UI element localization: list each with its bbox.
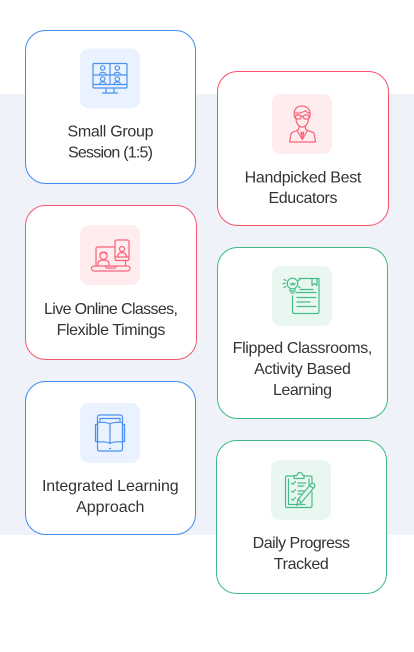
label: Integrated Learning [42, 478, 179, 495]
card: Flipped Classrooms [218, 248, 388, 418]
icon: educator with glasses [272, 94, 332, 154]
card: Integrated Learning Approach [26, 382, 196, 534]
card: Small Group Session [26, 30, 196, 184]
label [42, 478, 179, 516]
card: Daily Progress Tracked [216, 440, 386, 594]
card: Live Online Classes [26, 206, 196, 360]
label [233, 340, 372, 399]
label: Approach [76, 499, 144, 516]
label: Handpicked Best [245, 169, 362, 186]
icon: clipboard checklist and pencil [271, 460, 331, 520]
label: Activity Based [254, 361, 351, 378]
label: Educators [268, 190, 338, 207]
label: Daily Progress [253, 535, 350, 552]
label: Small Group [68, 124, 154, 140]
label [253, 535, 350, 573]
icon: video call monitor [80, 48, 140, 108]
label: Learning [273, 382, 332, 399]
label: Session (1:5) [68, 144, 153, 161]
label [44, 301, 178, 339]
label: Flipped Classrooms, [233, 340, 372, 357]
icon: lightbulb and document [272, 266, 332, 326]
icon: laptop and phone [80, 225, 140, 285]
label [68, 124, 154, 161]
card: Handpicked Best Educators [218, 72, 388, 226]
label: Live Online Classes, [44, 301, 178, 318]
label [245, 169, 362, 207]
label: Flexible Timings [57, 322, 165, 339]
icon: book on tablet [80, 403, 140, 463]
background band [0, 94, 414, 535]
label: Tracked [274, 556, 329, 573]
